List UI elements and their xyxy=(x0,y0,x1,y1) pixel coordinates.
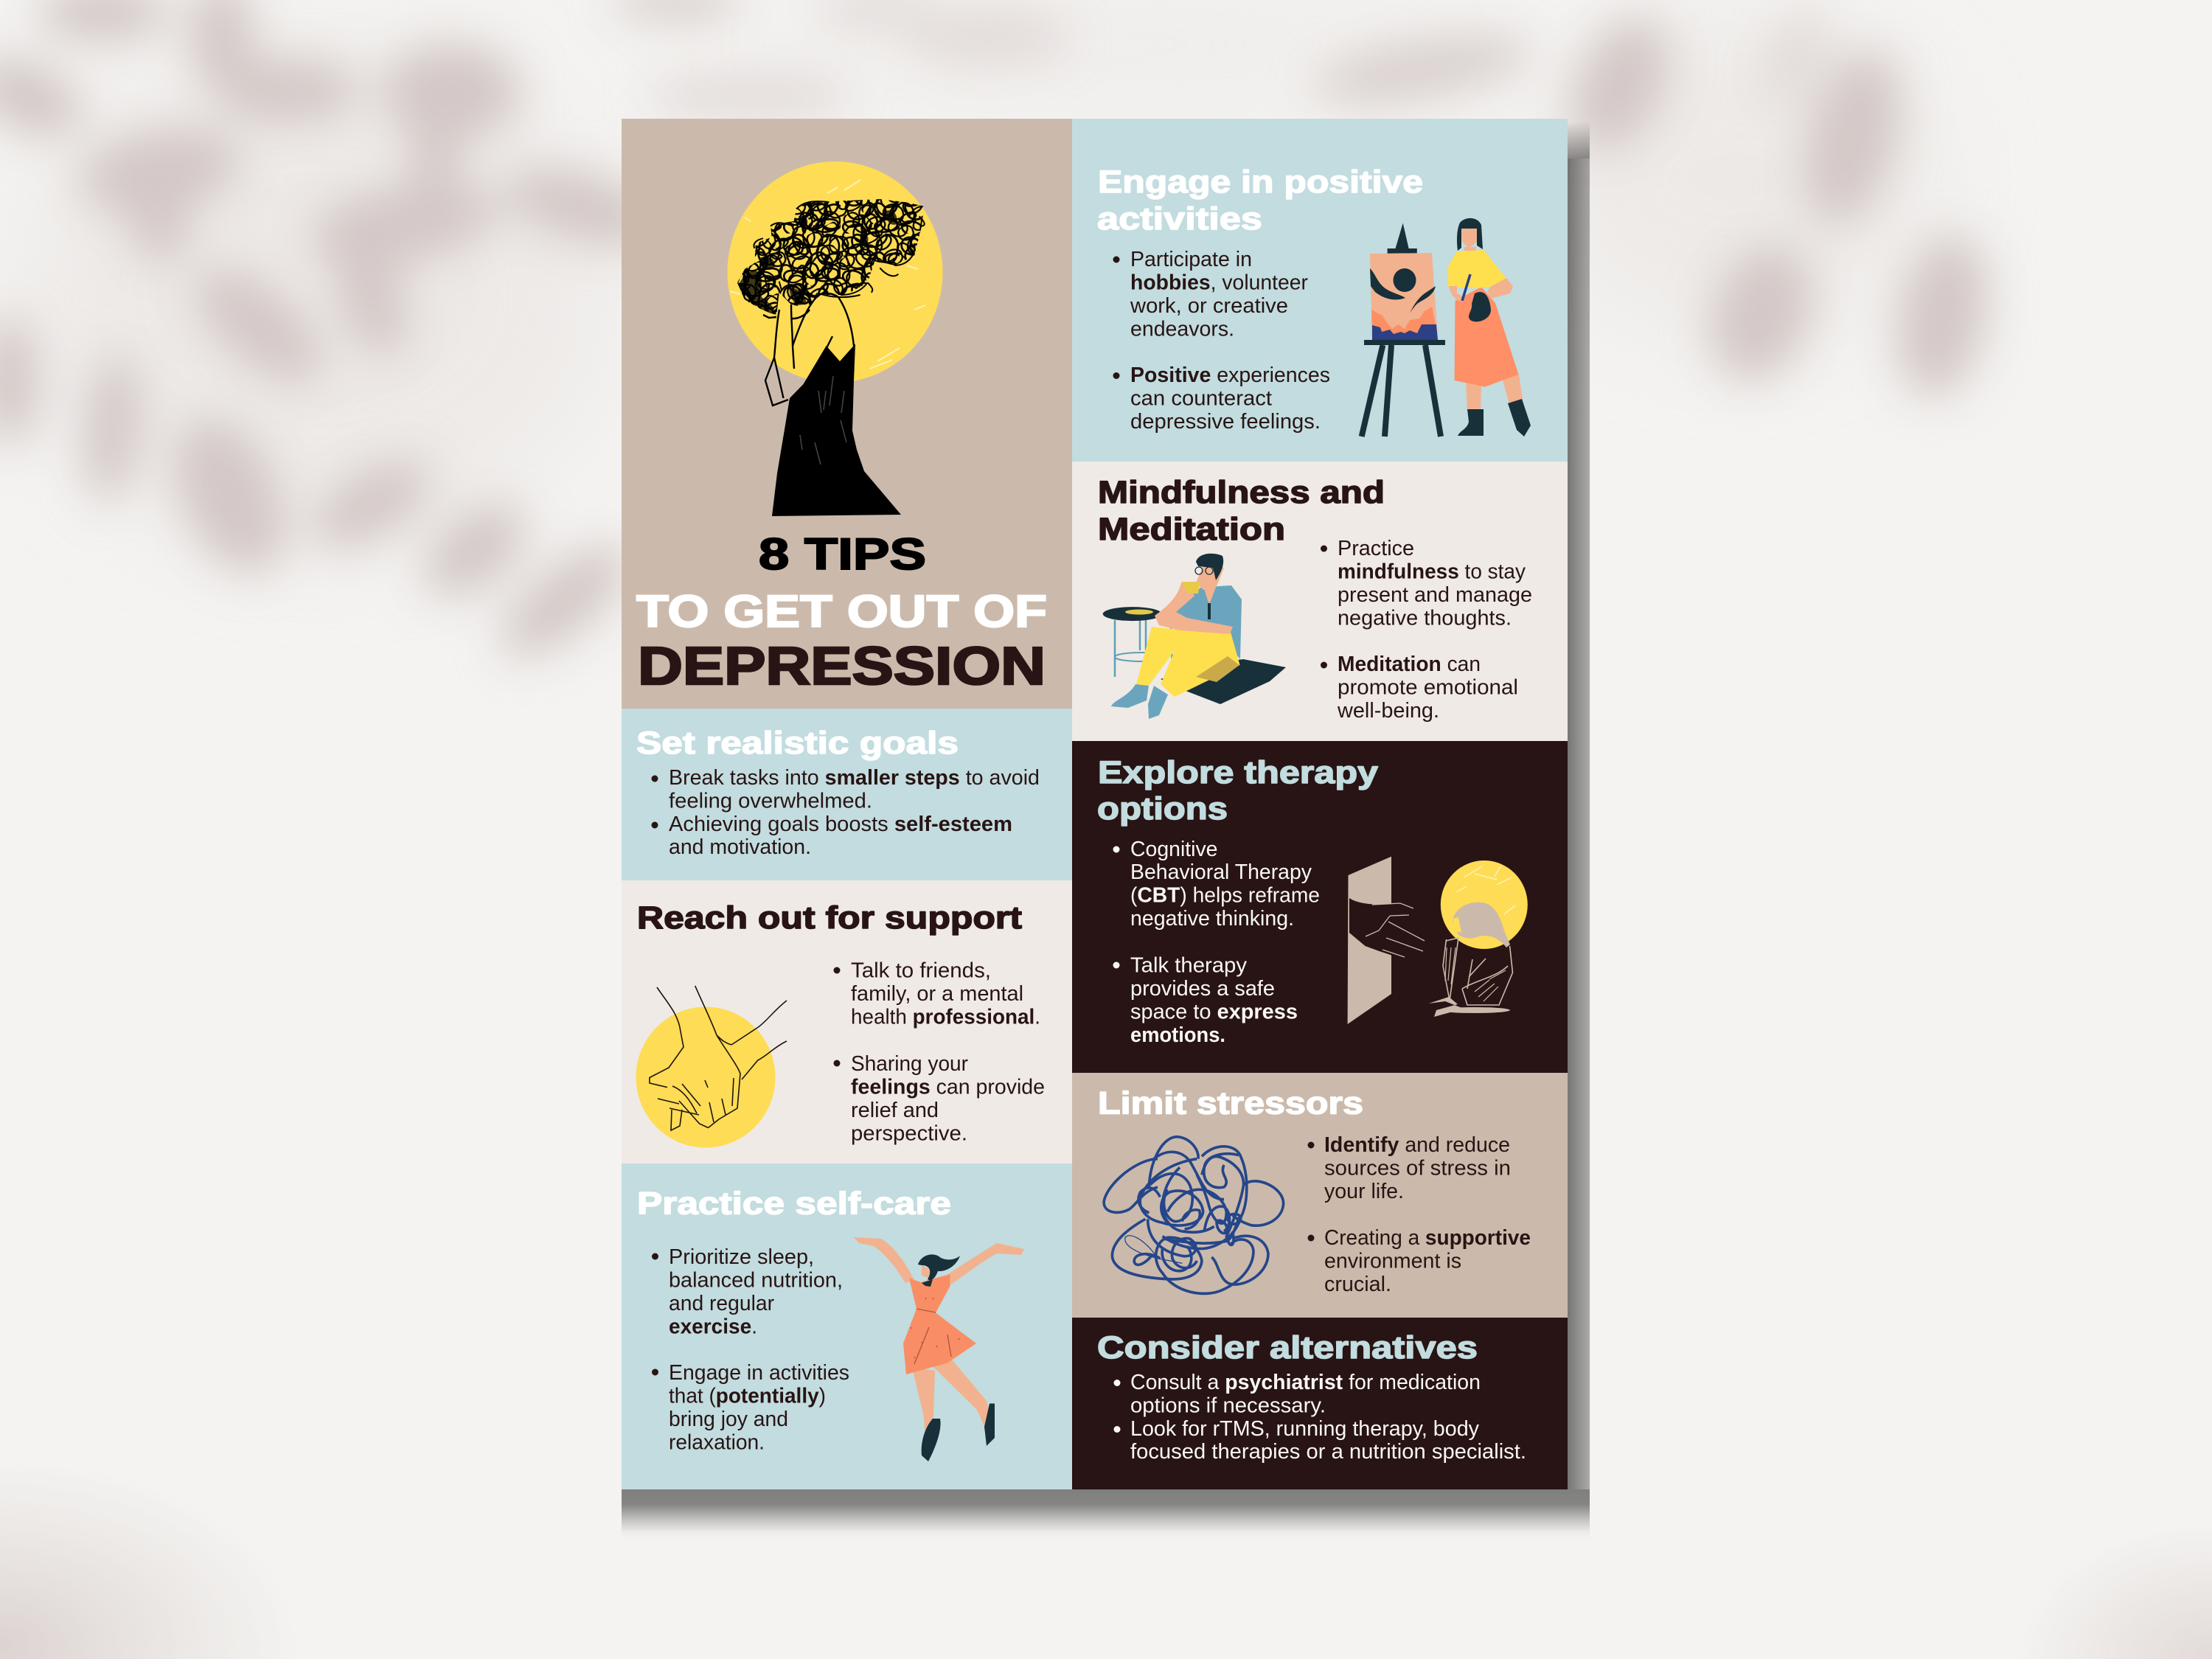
heading: limit stressors: Limit stressors xyxy=(1098,1085,1363,1121)
text: support bullets: perspective. xyxy=(851,1122,967,1146)
title: to get out of: TO GET OUT OF xyxy=(636,586,1047,636)
heading: mindfulness and meditation: Mindfulness and xyxy=(1098,475,1385,510)
heading: mindfulness and meditation: Meditation xyxy=(1098,512,1285,547)
text: mindfulness bullets: well-being. xyxy=(1337,699,1439,723)
text: self-care bullets: Prioritize sleep, xyxy=(669,1245,814,1269)
text: stressors bullets: environment is xyxy=(1324,1249,1461,1273)
text: mindfulness bullets: mindfulness to stay xyxy=(1338,560,1526,584)
text: goals bullets: Break tasks into smaller steps to avoid xyxy=(669,766,1040,790)
text: stressors bullets xyxy=(1308,1133,1531,1296)
text: support bullets: relief and xyxy=(851,1099,939,1122)
text: support bullets: health professional. xyxy=(851,1006,1040,1029)
text: stressors bullets: Identify and reduce xyxy=(1324,1133,1510,1157)
text: stressors bullets: your life. xyxy=(1324,1180,1404,1203)
illustration: painter at easel xyxy=(1362,218,1531,437)
text: alternatives bullets: Look for rTMS, running therapy, body xyxy=(1130,1417,1479,1441)
text: self-care bullets: that (potentially) xyxy=(669,1385,826,1408)
text: support bullets: Talk to friends, xyxy=(851,959,991,982)
panel: practice self-care xyxy=(622,1164,1072,1489)
text: therapy bullets xyxy=(1113,838,1320,1047)
text: mindfulness bullets: promote emotional xyxy=(1338,675,1518,699)
text: alternatives bullets: Consult a psychiatrist for medication xyxy=(1130,1371,1481,1394)
text: activities bullets: can counteract xyxy=(1130,386,1272,410)
text: therapy bullets: space to express xyxy=(1130,1000,1298,1023)
panel: set realistic goals xyxy=(622,709,1072,880)
icon: yellow sun circle xyxy=(727,161,942,383)
illustration: door with helping hand xyxy=(1348,857,1427,1024)
text: self-care bullets: balanced nutrition, xyxy=(669,1268,843,1292)
text: activities bullets: Positive experiences xyxy=(1130,364,1330,387)
text: support bullets xyxy=(833,959,1045,1146)
text: stressors bullets: crucial. xyxy=(1324,1273,1391,1296)
panel: reach out for support xyxy=(622,880,1072,1164)
heading: mindfulness and meditation xyxy=(1098,475,1385,547)
text: mindfulness bullets: present and manage xyxy=(1338,583,1532,607)
text: self-care bullets: exercise. xyxy=(669,1315,757,1339)
illustration: holding hands xyxy=(636,986,787,1147)
text: alternatives bullets: focused therapies or a nutrition specialist. xyxy=(1130,1440,1526,1464)
text: alternatives bullets xyxy=(1113,1371,1526,1464)
text: stressors bullets: Creating a supportive xyxy=(1324,1226,1531,1250)
heading: consider alternatives: Consider alternatives xyxy=(1097,1330,1478,1366)
text: activities bullets: depressive feelings. xyxy=(1130,410,1321,434)
text: goals bullets xyxy=(652,766,1040,859)
poster drop shadow xyxy=(622,122,1590,1540)
text: mindfulness bullets: Practice xyxy=(1338,537,1414,560)
heading: practice self-care: Practice self-care xyxy=(637,1186,951,1221)
text: self-care bullets: and regular xyxy=(669,1292,774,1315)
text: activities bullets: endeavors. xyxy=(1130,317,1234,341)
illustration: crouching girl with yellow circle xyxy=(1429,860,1528,1017)
heading: explore therapy options: options xyxy=(1097,791,1228,827)
heading: engage in positive activities: Engage in positive xyxy=(1098,164,1423,200)
text: goals bullets: feeling overwhelmed. xyxy=(669,789,872,813)
illustration: woman with tangled hair xyxy=(737,199,925,516)
text: therapy bullets: Cognitive xyxy=(1130,838,1218,861)
text: therapy bullets: (CBT) helps reframe xyxy=(1130,883,1320,907)
panel: explore therapy options xyxy=(1072,741,1568,1073)
heading: explore therapy options: Explore therapy xyxy=(1098,755,1378,790)
heading: engage in positive activities xyxy=(1097,164,1423,237)
text: stressors bullets: sources of stress in xyxy=(1324,1156,1511,1180)
panel: mindfulness and meditation xyxy=(1072,462,1568,741)
text: therapy bullets: Behavioral Therapy xyxy=(1130,860,1312,884)
text: therapy bullets: Talk therapy xyxy=(1130,954,1248,978)
text: alternatives bullets: options if necessary. xyxy=(1130,1394,1326,1417)
text: mindfulness bullets: negative thoughts. xyxy=(1338,606,1512,630)
text: support bullets: family, or a mental xyxy=(851,982,1023,1006)
icon: blue tangled scribble xyxy=(1104,1137,1284,1293)
text: support bullets: Sharing your xyxy=(851,1052,968,1076)
illustration: meditating man with tea xyxy=(1103,554,1286,719)
heading: engage in positive activities: activities xyxy=(1097,201,1262,237)
text: self-care bullets xyxy=(652,1245,849,1454)
panel: engage in positive activities xyxy=(1072,119,1568,462)
text: goals bullets: Achieving goals boosts self-esteem xyxy=(669,813,1012,836)
text: goals bullets: and motivation. xyxy=(669,835,811,859)
heading: explore therapy options xyxy=(1097,755,1378,827)
panel: limit stressors xyxy=(1072,1073,1568,1318)
title: 8 tips: 8 TIPS xyxy=(759,529,926,579)
panel: consider alternatives xyxy=(1072,1318,1568,1489)
text: activities bullets: hobbies, volunteer xyxy=(1130,271,1308,295)
text: therapy bullets: provides a safe xyxy=(1130,977,1275,1001)
text: support bullets: feelings can provide xyxy=(851,1075,1045,1099)
text: therapy bullets: emotions. xyxy=(1130,1023,1225,1047)
title: depression: DEPRESSION xyxy=(638,637,1046,696)
text: activities bullets xyxy=(1113,248,1330,434)
text: mindfulness bullets: Meditation can xyxy=(1338,653,1481,676)
illustration: dancing woman xyxy=(854,1237,1024,1461)
heading: reach out for support: Reach out for support xyxy=(637,900,1022,936)
heading: set realistic goals: Set realistic goals xyxy=(636,726,959,761)
text: mindfulness bullets xyxy=(1321,537,1532,723)
text: self-care bullets: relaxation. xyxy=(669,1430,765,1454)
text: activities bullets: work, or creative xyxy=(1130,294,1288,318)
text: self-care bullets: Engage in activities xyxy=(669,1361,849,1385)
text: activities bullets: Participate in xyxy=(1130,248,1252,271)
panel: title hero xyxy=(622,119,1072,709)
text: self-care bullets: bring joy and xyxy=(669,1408,788,1431)
text: therapy bullets: negative thinking. xyxy=(1130,907,1294,931)
